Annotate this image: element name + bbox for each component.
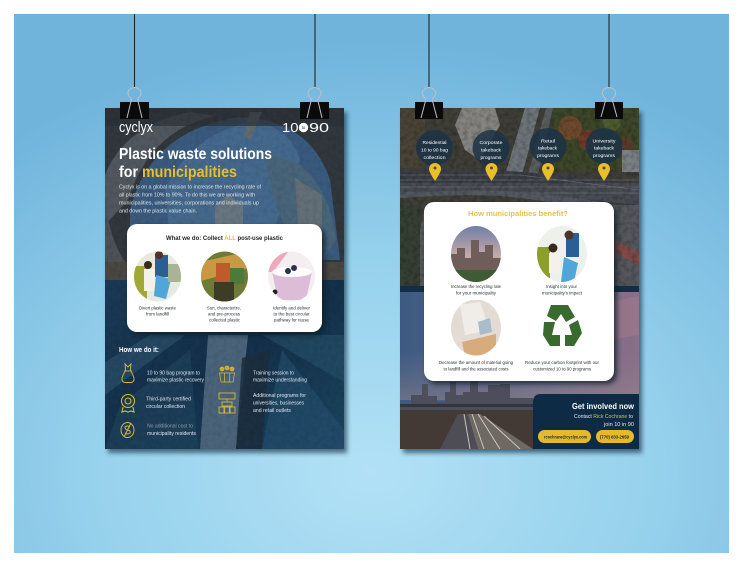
badge: retail: takeback [538,146,558,152]
icon: green recycling symbol [543,305,582,346]
icon: bag [122,364,134,382]
text: bag program: 10 to 90 bag program to [147,370,200,376]
text: no additional cost: municipality residents [147,431,196,437]
text: additional programs: and retail outlets [253,408,291,414]
badge: corporate: Corporate [480,140,503,146]
badge: residential [416,130,453,181]
panel: what we do [127,224,325,335]
icon: org chart [219,393,235,413]
badge: corporate: takeback [481,148,502,154]
caption: sort [207,306,241,324]
photo: sort plastic [201,251,249,303]
intro text: all plastic from 10% to 90%. To do this we are working with [119,192,255,198]
binder clip: right 1 [415,88,443,119]
caption: decrease [439,360,513,372]
caption: sort: collected plastic [209,318,241,324]
text: additional programs: Additional programs for [253,393,306,399]
text: certified: circular collection [146,404,185,410]
icon: training people [220,366,234,382]
text: training [253,370,307,384]
caption: divert: from landfill [146,312,169,318]
caption: identify: pathway for reuse [274,318,309,324]
caption: increase [451,284,501,297]
heading: benefit: How municipalities benefit? [468,209,568,218]
caption: reduce: customized 10 to 90 programs [533,366,592,372]
badge: university: takeback [594,146,615,152]
icon: certified badge [122,394,134,412]
badge: corporate: programs [480,155,502,161]
badge: residential: Residential [422,140,446,146]
icon: no cost [121,422,134,438]
binder clip: left 2 [300,88,329,119]
badge: retail: Retail [541,138,555,144]
panel: get involved [533,394,639,449]
badge: retail: programs [537,153,560,159]
binder clip: left 1 [120,88,149,119]
text: bag program: maximize plastic recovery [147,378,204,384]
logo: 10 to 90 [282,120,329,135]
photo: reuse [268,251,316,303]
caption: reduce: Reduce your carbon footprint with our [525,360,599,366]
contact text: Contact Rick Cochrane to [574,414,633,420]
caption: increase: for your municipality [456,291,497,297]
heading: how we do it: How we do it: [119,347,159,354]
panel: how municipalities benefit [424,202,617,384]
logo: 10 to 90: to [302,125,306,130]
intro text: and down the plastic value chain. [119,208,197,214]
badge: residential: 10 to 90 bag [421,148,448,154]
heading: what we do: What we do: Collect ALL post-use plastic [166,235,283,242]
photo: sorted waste [451,300,501,356]
city skyline [400,380,533,449]
binder clip: right 2 [595,88,623,119]
caption: insight: municipality's impact [542,291,583,297]
title: Plastic waste solutions [119,146,272,163]
aerial highway photo [400,108,639,291]
intro text: Cyclyx is on a global mission to increase the recycling rate of [119,184,261,190]
intro text [119,184,261,214]
badge: university: University [592,138,616,144]
text: training: maximize understanding [253,378,307,384]
caption: insight [542,284,583,297]
logo: cyclyx: cyclyx [119,120,154,136]
text: additional programs: universities, businesses [253,400,304,406]
badge: university: programs [593,153,616,159]
badge: university [586,128,622,181]
button: email: rcochrane@cyclyx.com [544,434,587,440]
caption: sort: Sort, characterize, [207,306,241,312]
photo: divert plastic [134,251,182,303]
logo: 10 to 90: 10 [282,120,298,135]
caption: identify: Identify and deliver [273,306,310,312]
poster: right [400,108,642,453]
caption: divert [139,306,176,318]
button: phone: (770) 633-2659 [600,434,629,440]
text: certified: Third-party certified [146,396,191,402]
text: certified [146,396,191,410]
badge: residential: collection [424,155,446,161]
hanging wires [134,14,609,88]
caption: sort: and pre-process [208,312,241,318]
contact text [574,414,634,428]
caption: increase: Increase the recycling rate [451,284,501,290]
text: no additional cost: No additional cost to [147,424,193,430]
intro text: municipalities, universities, corporations and individuals up [119,200,259,206]
caption: divert: Divert plastic waste [139,306,176,312]
dusk sky [400,292,639,404]
photo: couple recycling [537,226,587,282]
caption: insight: Insight into your [546,284,577,290]
caption: identify: to the best circular [274,312,310,318]
badge: corporate [472,130,510,181]
caption: identify [273,306,310,324]
caption: reduce [525,360,599,372]
caption: decrease: to landfill and the associated costs [444,366,509,372]
title line two: for municipalities [119,164,237,181]
text: training: Training session to [253,370,294,376]
contact text: join 10 in 90 [603,422,634,428]
photo: skyline [451,226,501,282]
text: bag program [147,370,204,384]
caption: decrease: Decrease the amount of material going [439,360,513,366]
text: additional programs [253,393,306,414]
badge: retail [530,128,566,181]
logo: 10 to 90: 90 [309,120,329,135]
heading: get involved: Get involved now [572,402,635,411]
text: no additional cost [147,424,196,437]
poster: left [105,108,347,453]
